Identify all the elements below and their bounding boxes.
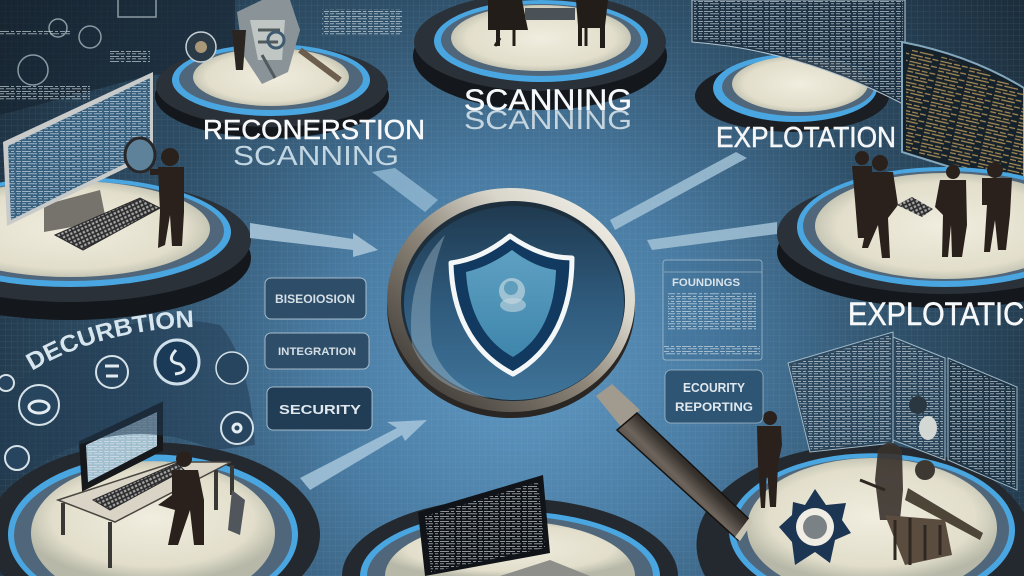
arrow: left platform to center	[250, 223, 378, 257]
group of people	[852, 151, 1012, 258]
heading: scanning	[464, 84, 632, 135]
reconnaissance machine and figure	[186, 0, 340, 84]
monitor and keyboard	[3, 72, 160, 250]
person with magnifier	[125, 138, 184, 248]
label box 3	[267, 387, 372, 430]
figure at desk	[158, 451, 245, 545]
label box 2	[265, 333, 369, 369]
platform: bottom-left	[0, 403, 320, 576]
report panel right: FOUNDINGS	[672, 277, 740, 289]
platform: top-center	[413, 0, 667, 110]
platform: top-left	[155, 0, 389, 138]
laptop	[418, 475, 590, 576]
label box 3: SECURITY	[279, 402, 361, 417]
right wall code screen	[902, 42, 1024, 190]
small label boxes	[265, 278, 372, 430]
icon: shield	[451, 236, 572, 374]
magnifying glass	[387, 188, 752, 541]
arrow: top right to center	[610, 152, 747, 230]
figures at table	[488, 0, 608, 48]
label box 2: INTEGRATION	[278, 346, 356, 358]
report panel right	[663, 260, 762, 360]
platform: right	[777, 151, 1024, 308]
person standing	[757, 411, 782, 508]
arrow: right platform to center	[647, 222, 777, 250]
security report box: ECOURITY	[683, 380, 745, 395]
heading: reconnaissance	[203, 114, 425, 171]
platform: bottom-right	[696, 332, 1024, 576]
lens glass	[404, 206, 624, 400]
label box 1	[265, 278, 366, 319]
label box 1: BISEOIOSION	[275, 292, 355, 306]
heading: reconnaissance: SCANNING	[233, 140, 399, 171]
arrow: reconnaissance to center	[372, 168, 438, 212]
security report box	[665, 370, 763, 423]
heading: scanning: SCANNING	[464, 84, 632, 117]
lens rim	[387, 194, 635, 418]
top-left holographic panel	[0, 0, 402, 115]
desk with monitor	[58, 403, 232, 568]
platform: top-right	[695, 54, 889, 132]
arrow: bottom-left to center	[300, 420, 427, 490]
icon: gear	[779, 489, 851, 565]
icon: blue circle	[155, 340, 199, 384]
security report box: REPORTING	[675, 400, 753, 414]
handle	[596, 384, 752, 541]
heading: reconnaissance: RECONERSTION	[203, 114, 425, 145]
code panels	[788, 332, 1017, 490]
heading: security arc: DECURBTION	[25, 310, 193, 370]
heading: exploitation upper: EXPLOTATION	[716, 122, 896, 154]
top-right data screen	[692, 0, 905, 105]
platform: bottom-center	[342, 475, 678, 576]
hooded figure and machinery	[860, 442, 983, 565]
heading: scanning: SCANNING	[464, 105, 632, 135]
left holographic icons cluster	[0, 320, 255, 480]
platform: left	[0, 72, 251, 320]
